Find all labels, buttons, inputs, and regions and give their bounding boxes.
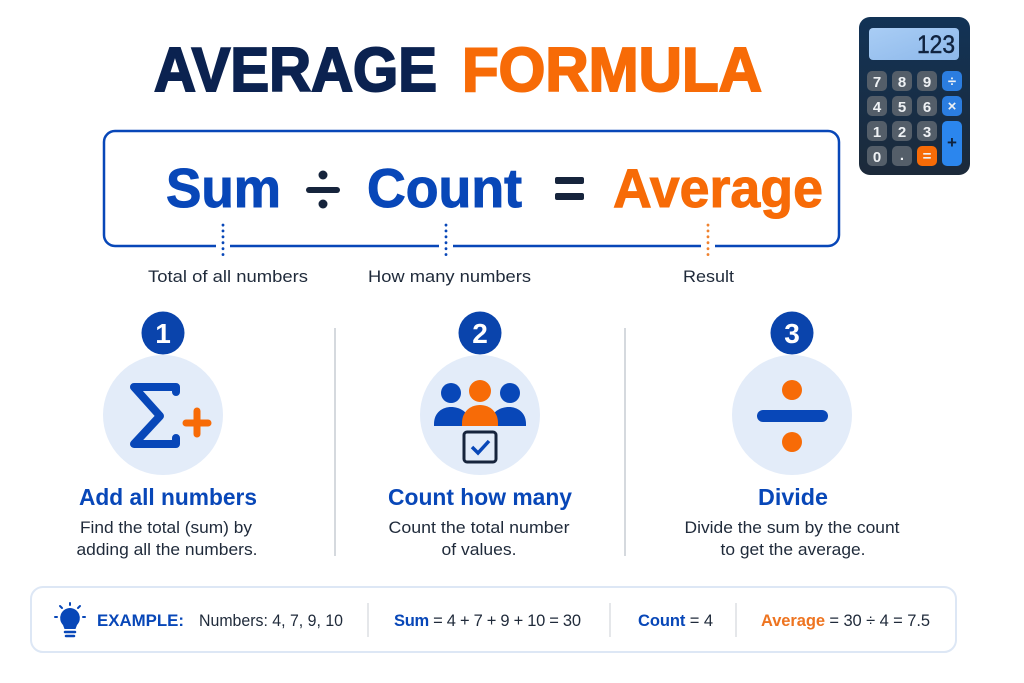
badge: 3: 3 (784, 318, 800, 349)
label: example: EXAMPLE: (97, 611, 184, 630)
icon: calculator: . (900, 147, 904, 164)
description (388, 519, 570, 559)
panel: step 2 (388, 312, 572, 559)
formula: count: Count (367, 157, 522, 219)
icon: calculator: = (923, 148, 932, 165)
icon: calculator: × (948, 98, 957, 115)
description: to get the average. (720, 541, 866, 559)
icon: calculator: 5 (898, 99, 906, 116)
description: Divide the sum by the count (684, 519, 900, 537)
icon: calculator: 3 (923, 124, 931, 141)
connector: average (707, 225, 709, 260)
icon: calculator: 9 (923, 74, 931, 91)
icon: calculator: 0 (873, 149, 881, 166)
panel: step 3 (684, 312, 900, 559)
icon circle: sigma plus (103, 355, 223, 475)
badge: 1 (142, 312, 184, 354)
badge: 1: 1 (155, 318, 171, 349)
label: how many numbers: How many numbers (368, 267, 531, 286)
text: numbers: Numbers: 4, 7, 9, 10 (199, 612, 343, 630)
connector: sum (222, 225, 224, 260)
heading: count how many: Count how many (388, 484, 572, 510)
badge: 2 (458, 312, 502, 354)
icon: calculator: 6 (923, 99, 931, 116)
description (76, 519, 258, 559)
label: result: Result (683, 267, 734, 286)
icon: calculator: 123 (917, 31, 955, 59)
title: AVERAGE (154, 36, 437, 105)
icon circle: people with checkbox (420, 355, 540, 475)
icon: calculator: 8 (898, 74, 906, 91)
icon: calculator: 1 (873, 124, 881, 141)
title (154, 36, 762, 105)
icon: calculator: 2 (898, 124, 906, 141)
panel: formula box (104, 131, 839, 246)
icon: calculator: ÷ (948, 73, 956, 90)
text: count: Count = 4 (638, 612, 713, 630)
icon: divide sign (306, 170, 340, 208)
badge: 3 (770, 312, 814, 354)
badge: 2: 2 (472, 318, 488, 349)
title: FORMULA (462, 36, 762, 105)
icon: calculator: 4 (873, 99, 882, 116)
text: sum: Sum = 4 + 7 + 9 + 10 = 30 (394, 612, 581, 630)
description (684, 519, 900, 559)
icon: equals sign (555, 177, 584, 200)
connector: count (445, 225, 447, 260)
formula: average: Average (613, 157, 823, 219)
panel: step 1 (76, 312, 258, 559)
icon: light bulb (55, 603, 85, 636)
icon: calculator (859, 17, 970, 175)
heading: add all numbers: Add all numbers (79, 484, 257, 510)
formula: sum: Sum (166, 157, 281, 219)
icon: calculator: 7 (873, 74, 881, 91)
label: total of all numbers: Total of all numbers (148, 267, 308, 286)
description: Find the total (sum) by (80, 519, 253, 537)
description: Count the total number (388, 519, 570, 537)
description: adding all the numbers. (76, 541, 258, 559)
text: average: Average = 30 ÷ 4 = 7.5 (761, 612, 930, 630)
panel: example bar (31, 587, 956, 652)
icon circle: divide (732, 355, 852, 475)
icon: calculator: + (947, 133, 957, 152)
heading: divide: Divide (758, 484, 828, 510)
description: of values. (442, 541, 516, 559)
